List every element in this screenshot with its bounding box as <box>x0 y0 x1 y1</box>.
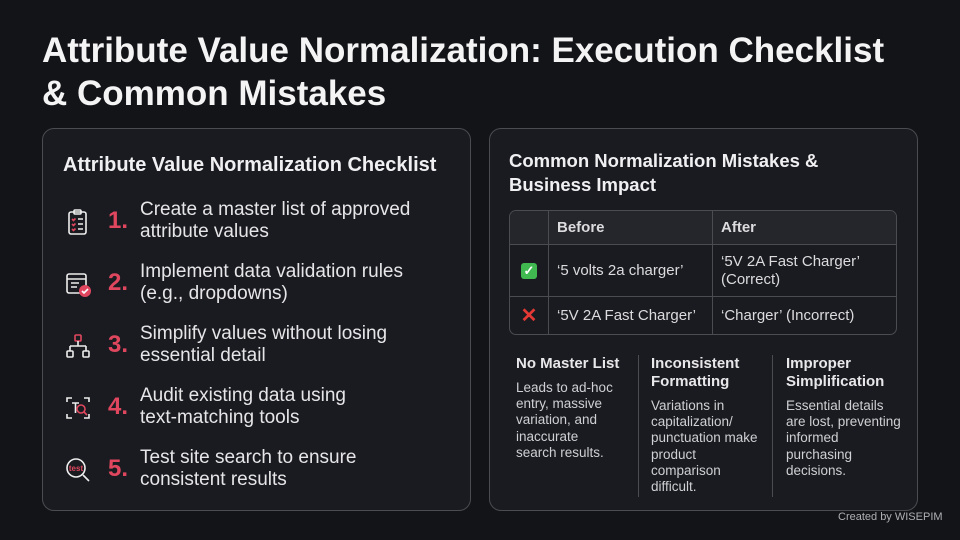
title: Attribute Value Normalization: Execution Checklist & Common Mistakes <box>42 31 884 113</box>
heading: checklist: Attribute Value Normalization Checklist <box>63 154 436 176</box>
table: before/after: ‘5V 2A Fast Charger’ <box>721 252 860 270</box>
item 5 <box>66 447 356 490</box>
column: improper simplification: Essential details <box>786 398 884 413</box>
item 1: Create a master list of approved <box>140 199 410 220</box>
icon: clipboard <box>68 209 87 235</box>
column: inconsistent formatting: capitalization/ <box>651 414 733 429</box>
icon: text scan <box>66 397 90 419</box>
item 4: Audit existing data using <box>140 385 346 406</box>
table: before/after: ‘5 volts 2a charger’ <box>557 262 683 278</box>
column: no master list: inaccurate <box>516 429 578 444</box>
column: improper simplification: informed <box>786 430 839 445</box>
column: inconsistent formatting: Variations in <box>651 398 724 413</box>
icon: search test <box>66 458 90 482</box>
column: no master list: No Master List <box>516 355 619 372</box>
column: inconsistent formatting <box>638 355 768 497</box>
column: inconsistent formatting: difficult. <box>651 479 697 494</box>
column: improper simplification: are lost, preventing <box>786 414 901 429</box>
icon: hierarchy <box>66 334 90 358</box>
column: no master list: search results. <box>516 445 604 460</box>
item 3: essential detail <box>140 345 266 366</box>
table: before/after: (Correct) <box>721 270 780 288</box>
table: before/after: ✓ <box>524 262 534 278</box>
column: no master list: variation, and <box>516 412 597 427</box>
column: inconsistent formatting: Formatting <box>651 373 729 390</box>
icon: form check <box>66 273 91 297</box>
heading: mistakes <box>509 150 818 195</box>
table: before/after: ‘5V 2A Fast Charger’ <box>557 306 696 324</box>
heading: mistakes: Common Normalization Mistakes & <box>509 150 818 171</box>
item 2: 2. <box>108 269 128 296</box>
item 2 <box>66 261 403 304</box>
column: improper simplification: purchasing <box>786 447 852 462</box>
item 3: 3. <box>108 331 128 358</box>
footer credit: Created by WISEPIM <box>838 511 943 523</box>
column: inconsistent formatting: punctuation make <box>651 430 758 445</box>
item 4 <box>66 385 346 428</box>
item 1: attribute values <box>140 221 269 242</box>
column: improper simplification: Simplification <box>786 373 884 390</box>
column: no master list: entry, massive <box>516 396 602 411</box>
icon: search test: test <box>69 464 83 473</box>
item 5: consistent results <box>140 469 287 490</box>
item 1: 1. <box>108 207 128 234</box>
heading: mistakes: Business Impact <box>509 174 656 195</box>
panel: checklist <box>42 128 471 511</box>
table: before/after: Before <box>557 219 605 236</box>
table: before/after <box>509 210 897 335</box>
table: before/after: ✕ <box>521 304 537 326</box>
item 5: Test site search to ensure <box>140 447 356 468</box>
column: inconsistent formatting: product <box>651 447 696 462</box>
column: no master list: Leads to ad-hoc <box>516 380 613 395</box>
item 4: text-matching tools <box>140 407 299 428</box>
table: before/after: After <box>721 219 756 236</box>
item 2: (e.g., dropdowns) <box>140 283 288 304</box>
item 4: 4. <box>108 393 128 420</box>
item 1 <box>68 199 410 242</box>
column: inconsistent formatting: comparison <box>651 463 721 478</box>
column: improper simplification <box>772 355 912 497</box>
column: improper simplification: decisions. <box>786 463 846 478</box>
item 5: 5. <box>108 455 128 482</box>
panel: mistakes <box>489 128 918 511</box>
column: improper simplification: Improper <box>786 355 851 372</box>
table: before/after: ‘Charger’ (Incorrect) <box>721 306 854 324</box>
item 3 <box>66 323 387 366</box>
column: inconsistent formatting: Inconsistent <box>651 355 739 372</box>
column: no master list <box>516 355 620 460</box>
item 2: Implement data validation rules <box>140 261 403 282</box>
item 3: Simplify values without losing <box>140 323 387 344</box>
